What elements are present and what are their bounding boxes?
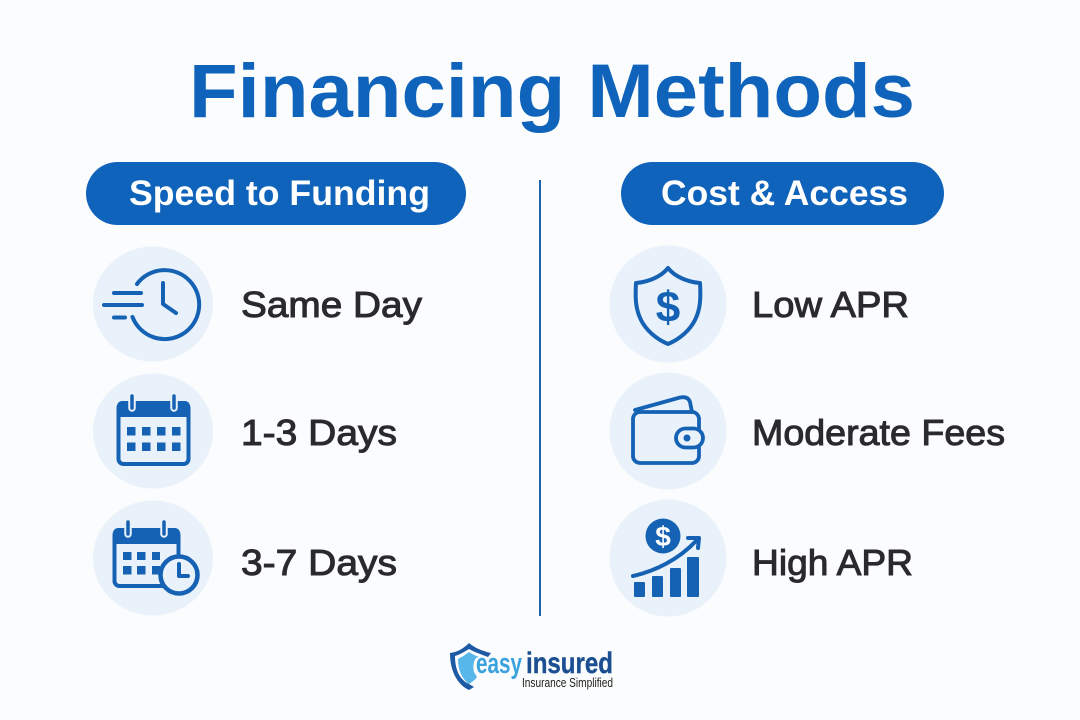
heading pill: Cost & Access — [621, 162, 944, 225]
heading pill: Cost & Access: Cost & Access — [661, 174, 908, 213]
icon: rising cost chart — [610, 500, 726, 616]
icon: clock — [93, 246, 213, 362]
row: 3-7 days — [93, 500, 397, 616]
heading pill: Speed to Funding — [86, 162, 466, 225]
row: high apr — [610, 500, 913, 616]
center divider — [539, 180, 541, 616]
logo wordmark: easy: easy — [476, 648, 522, 680]
row: 1-3 days — [93, 374, 397, 488]
label: 1-3 days: 1-3 Days — [241, 412, 397, 453]
icon: calendar — [93, 374, 213, 488]
logo: easy insured — [450, 643, 613, 690]
icon: shield with dollar — [610, 246, 726, 362]
row: same day — [93, 246, 423, 362]
panel: speed to funding — [86, 162, 466, 616]
label: high apr: High APR — [752, 542, 913, 583]
row: low apr — [610, 246, 909, 362]
row: moderate fees — [610, 372, 1005, 490]
title: Financing Methods — [189, 49, 915, 134]
heading pill: Speed to Funding: Speed to Funding — [129, 174, 430, 213]
icon: rising cost chart: $ — [655, 521, 671, 552]
label: low apr: Low APR — [752, 284, 909, 325]
label: moderate fees: Moderate Fees — [752, 412, 1005, 453]
icon: wallet — [610, 372, 726, 490]
icon: logo shield — [450, 643, 491, 690]
label: 3-7 days: 3-7 Days — [241, 542, 397, 583]
icon: calendar with clock — [93, 500, 213, 616]
label: same day: Same Day — [241, 284, 423, 325]
logo tagline: Insurance Simplified — [522, 676, 613, 690]
icon: shield with dollar: $ — [656, 283, 680, 332]
logo wordmark: insured: insured — [526, 647, 613, 680]
panel: cost and access — [610, 162, 1005, 616]
